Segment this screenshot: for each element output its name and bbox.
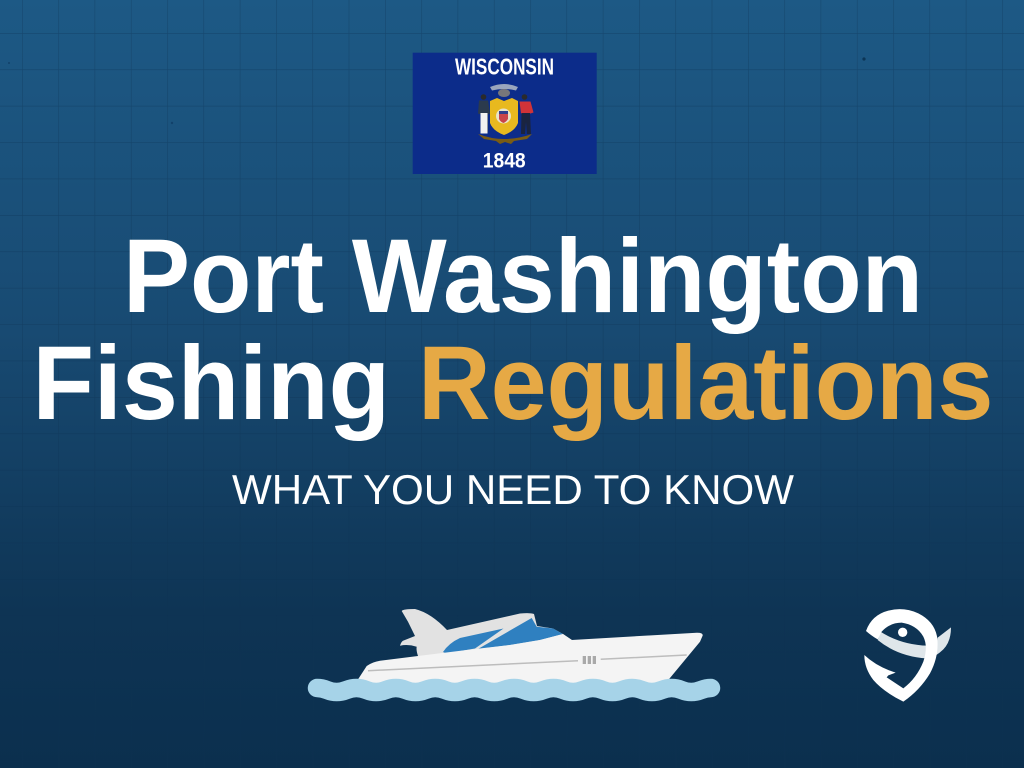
boat upper cabin [400, 609, 572, 660]
logo body band [878, 632, 928, 658]
water waves [317, 688, 711, 692]
icon: fish hook logo [864, 609, 951, 702]
boat hull [355, 633, 703, 684]
title [32, 218, 994, 442]
flag text: WISCONSIN: WISCONSIN [455, 54, 554, 80]
hull stripe [368, 655, 687, 671]
logo tail [935, 627, 951, 656]
subtitle: WHAT YOU NEED TO KNOW [232, 466, 794, 513]
boat windscreen [478, 618, 563, 649]
icon: Wisconsin state flag [413, 53, 597, 174]
boat side window [443, 628, 504, 654]
flag emblem: coat of arms [478, 84, 534, 144]
logo eye [898, 628, 907, 637]
icon: motor yacht on waves [317, 609, 711, 692]
flag text: 1848: 1848 [483, 150, 526, 172]
title line: Fishing Regulations: Fishing Regulations [32, 325, 994, 442]
logo outer shape [864, 609, 938, 702]
title line: Port Washington: Port Washington [123, 218, 923, 335]
hull vent [583, 656, 596, 664]
